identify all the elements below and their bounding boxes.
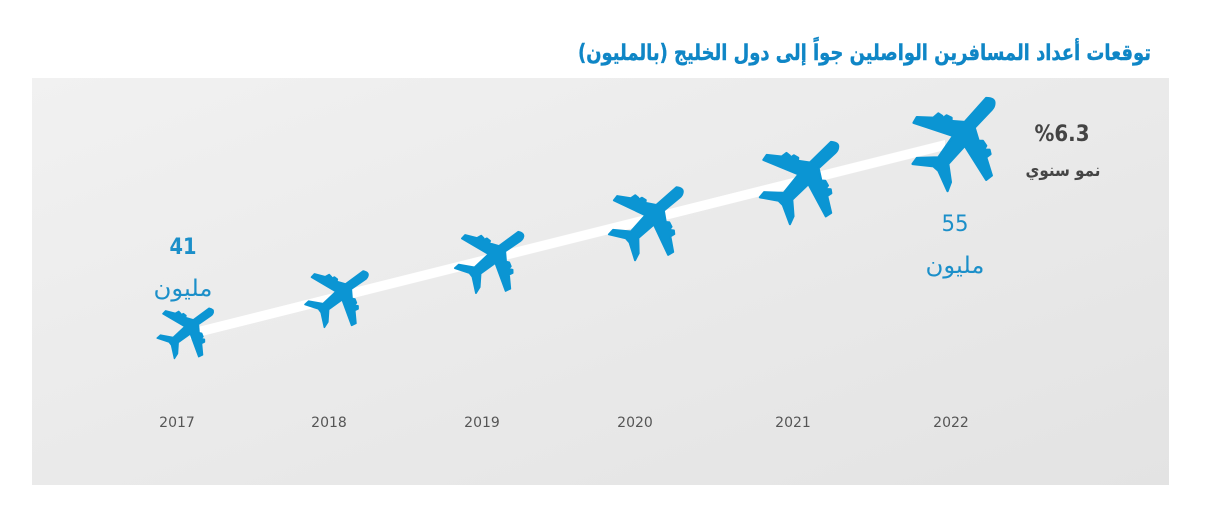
value label: 2022: 55 [942, 212, 968, 237]
growth callout: %6.3 [1034, 122, 1090, 147]
year axis labels [159, 415, 969, 431]
value label: 2017: 41 [170, 235, 196, 260]
year axis labels: 2018 [311, 415, 347, 431]
growth callout [1026, 122, 1100, 181]
year axis labels: 2019 [464, 415, 500, 431]
icon: plane 2021 [758, 137, 838, 227]
value label: 2022 [926, 212, 984, 279]
year axis labels: 2020 [617, 415, 653, 431]
value label: 2017: مليون [154, 276, 212, 302]
panel: chart background [32, 78, 1169, 485]
year axis labels: 2022 [933, 415, 969, 431]
year axis labels: 2021 [775, 415, 811, 431]
icon: plane 2020 [606, 180, 683, 265]
icon: plane 2019 [451, 220, 524, 300]
value label: 2017 [154, 235, 212, 302]
icon: plane 2017 [154, 299, 214, 364]
icon: plane 2022 [913, 98, 994, 191]
growth callout: نمو سنوي [1026, 161, 1100, 181]
year axis labels: 2017 [159, 415, 195, 431]
value label: 2022: مليون [926, 253, 984, 279]
trend line [190, 140, 945, 339]
icon: plane 2018 [301, 261, 369, 334]
